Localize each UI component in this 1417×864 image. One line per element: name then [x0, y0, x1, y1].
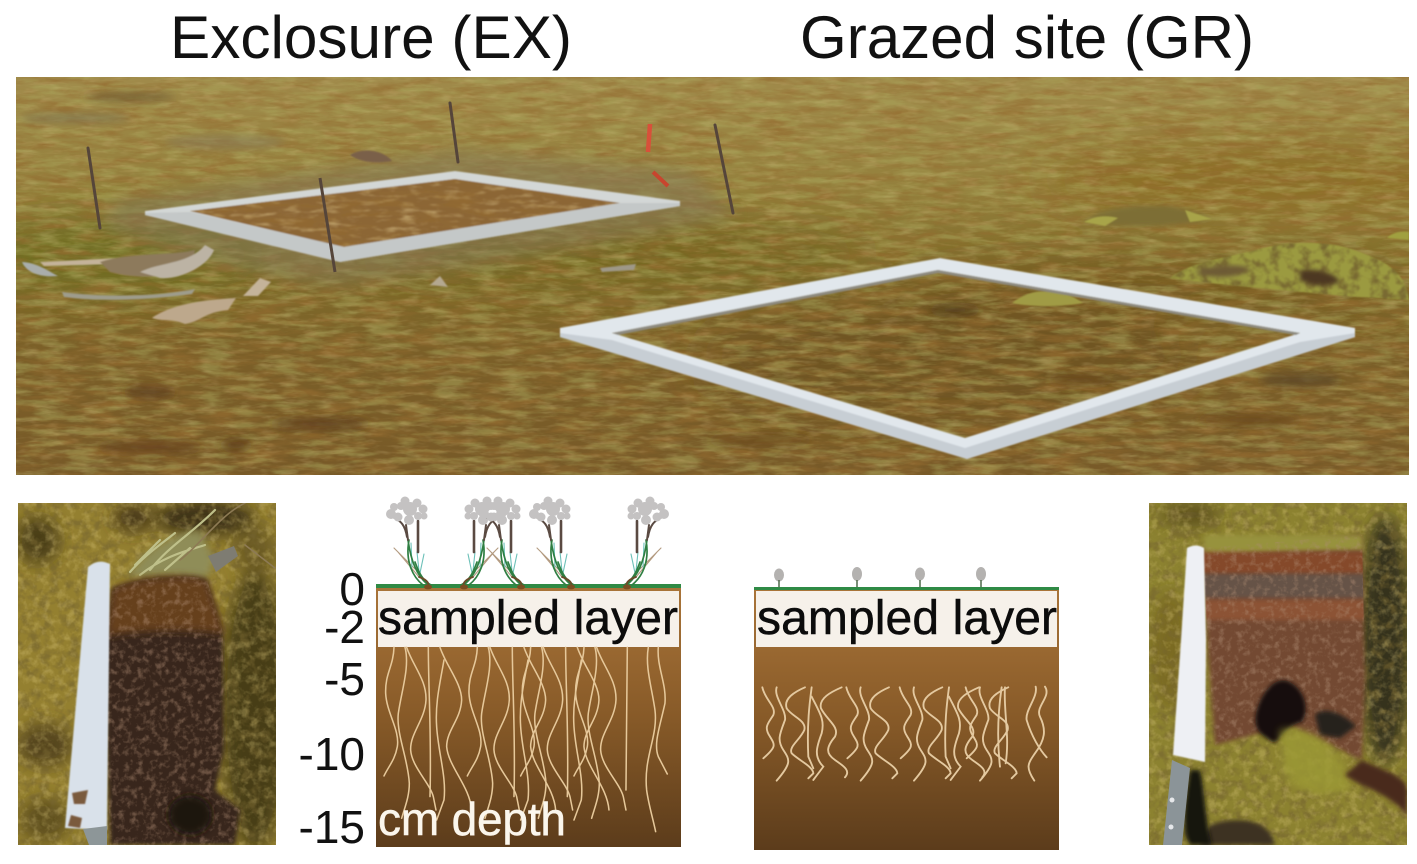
streaks and dark patches — [20, 93, 1340, 453]
sampled layer band: sampled layer — [378, 592, 678, 645]
depth axis labels: -2 — [324, 601, 365, 653]
photo: grazed soil core — [1149, 503, 1411, 845]
grass tuft — [128, 530, 214, 582]
diagram: grazed soil profile — [754, 567, 1059, 850]
exclosure fence posts behind frame — [88, 103, 733, 228]
large metal frame — [560, 258, 1355, 459]
ruler — [65, 562, 110, 830]
shallow roots — [762, 687, 1047, 781]
depth axis labels: -15 — [299, 801, 365, 853]
surface vegetation line — [754, 587, 1059, 590]
surface vegetation line — [376, 584, 681, 588]
diagram: exclosure soil profile — [376, 496, 681, 847]
cotton-grass plants — [386, 496, 669, 589]
depth axis labels: -10 — [299, 728, 365, 780]
depth axis labels: 0 — [339, 563, 365, 615]
deep roots — [384, 647, 667, 832]
debris — [22, 151, 636, 324]
soil block — [105, 576, 240, 845]
moss mounds — [1012, 206, 1410, 306]
panel: field photograph — [0, 77, 1417, 475]
photo: exclosure soil core — [16, 500, 289, 850]
ruler — [1173, 546, 1206, 762]
small grazed plants — [774, 567, 986, 587]
layered block — [1203, 535, 1365, 760]
label: cm depth: cm depth — [378, 793, 566, 845]
title: Exclosure (EX): Exclosure (EX) — [170, 4, 572, 71]
title: Grazed site (GR): Grazed site (GR) — [800, 4, 1254, 71]
sampled layer band: sampled layer — [757, 592, 1057, 645]
depth axis labels — [299, 563, 365, 853]
exclosure vegetation halo — [100, 150, 735, 285]
small metal frame — [145, 171, 680, 262]
depth axis labels: -5 — [324, 653, 365, 705]
